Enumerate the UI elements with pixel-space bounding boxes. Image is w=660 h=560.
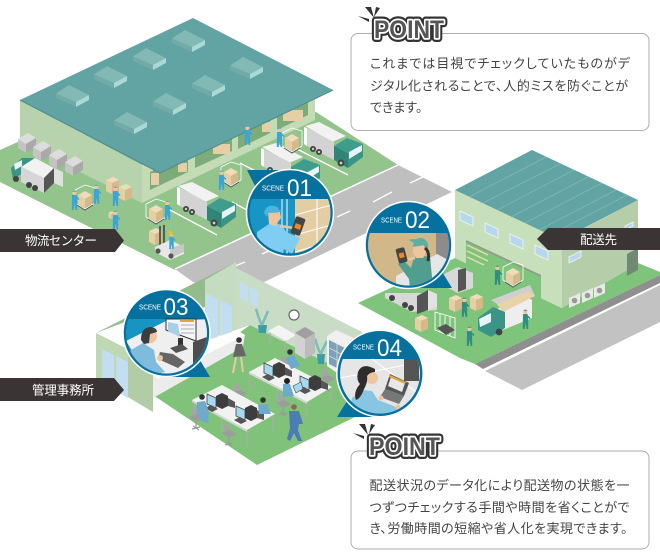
label: 配送先: 配送先: [580, 232, 617, 247]
point heading bottom: POINT: [369, 433, 440, 461]
scene 01 bubble: [245, 170, 335, 259]
delivery right wall: [562, 200, 638, 308]
point box bottom: [351, 451, 649, 549]
scene 04 bubble: 04: [377, 335, 402, 362]
scene 01 bubble: 01: [287, 175, 312, 202]
copier: [295, 327, 315, 359]
windows: [460, 211, 633, 263]
delivery roof: [455, 150, 638, 240]
point heading top: POINT: [374, 16, 444, 44]
point panel: bottom: [351, 424, 649, 549]
scene 04 label: SCENE: [353, 342, 374, 352]
point text bottom: つずつチェックする手間や時間を省くことがで: [369, 500, 630, 515]
point text bottom: き、労働時間の短縮や省人化を実現できます。: [370, 521, 628, 536]
label: 物流センター: 物流センター: [25, 234, 97, 248]
scene 02 illustration: [368, 233, 449, 286]
point text top: [370, 56, 630, 115]
scene 01 illustration: [250, 199, 330, 254]
loading bays: [150, 100, 308, 190]
office desks: [189, 337, 335, 446]
point heading top: POINT: [374, 16, 444, 44]
office left wall: [96, 333, 153, 412]
carts and boxes: [75, 128, 302, 224]
label: 配送先: [537, 228, 660, 250]
label: 物流センター: [0, 229, 124, 252]
scene 04 bubble: [337, 330, 423, 419]
warehouse building: [20, 18, 333, 203]
delivery boxes and carts: [415, 262, 523, 338]
point text bottom: [369, 478, 630, 536]
forklift: [149, 225, 184, 260]
desk cluster back: [249, 358, 332, 418]
desk cluster front: [192, 385, 275, 446]
point text top: ジタル化されることで、人的ミスを防ぐことが: [370, 78, 628, 94]
wall clock: [289, 310, 299, 320]
back table: [268, 325, 296, 350]
point heading top: POINT: [374, 16, 444, 44]
office upper wall: [96, 262, 236, 335]
office chairs back row: [232, 356, 335, 406]
scene 03 bubble: [123, 290, 212, 380]
walking woman: [233, 337, 246, 373]
scene 02 bubble: [365, 202, 455, 293]
scene 03 label: SCENE: [139, 302, 161, 312]
scene 02 label: SCENE: [381, 216, 402, 224]
plants: [256, 309, 327, 364]
delivery left wall: [455, 190, 562, 308]
point text bottom: 配送状況のデータ化により配送物の状態を一: [370, 478, 630, 493]
lower road: [475, 275, 660, 390]
delivery vehicles: [385, 267, 535, 337]
air conditioners: [569, 283, 605, 308]
office: [96, 262, 400, 465]
office back wall: [236, 268, 362, 380]
office chairs front row: [189, 393, 291, 446]
door: [627, 248, 638, 276]
scene 03 bubble: 03: [164, 294, 188, 321]
lockers: [327, 330, 358, 375]
reception counter: [153, 332, 245, 398]
delivery workers: [462, 266, 530, 346]
roof skylights: [56, 30, 263, 134]
scene 01 label: SCENE: [262, 184, 284, 192]
scene 03 illustration: [126, 318, 207, 374]
warehouse front wall: [142, 85, 315, 203]
point panel: top: [351, 7, 649, 130]
warehouse workers: [72, 126, 284, 230]
point heading bottom: POINT: [369, 433, 440, 461]
point heading bottom: POINT: [369, 433, 440, 461]
upper road: [175, 165, 452, 285]
scene 02 bubble: 02: [405, 207, 430, 234]
truck: upper right: [304, 122, 363, 168]
shelves: [467, 245, 488, 265]
point text top: これまでは目視でチェックしていたものがデ: [370, 56, 630, 71]
label: 管理事務所: [0, 378, 124, 401]
delivery yard: [358, 258, 660, 364]
concrete blocks: [18, 133, 83, 176]
truck: yard left: [11, 158, 63, 193]
office staff: [197, 349, 300, 423]
warehouse roof: [20, 18, 333, 173]
warehouse yard: [0, 112, 398, 270]
scene 04 illustration: [340, 358, 420, 414]
parking lines: [170, 148, 348, 235]
point heading bottom: [353, 424, 440, 461]
point text top: できます。: [370, 100, 422, 115]
entrance windows: [102, 282, 258, 398]
truck: centre: [177, 182, 236, 228]
walking man: [287, 404, 303, 441]
point box top: [351, 34, 649, 130]
point heading top: [358, 7, 444, 44]
label: 管理事務所: 管理事務所: [32, 382, 94, 398]
delivery building: [455, 150, 638, 308]
warehouse side wall: [20, 100, 142, 203]
office floor: [153, 325, 400, 465]
dock opening: [466, 241, 541, 300]
truck: upper centre: [261, 143, 320, 189]
